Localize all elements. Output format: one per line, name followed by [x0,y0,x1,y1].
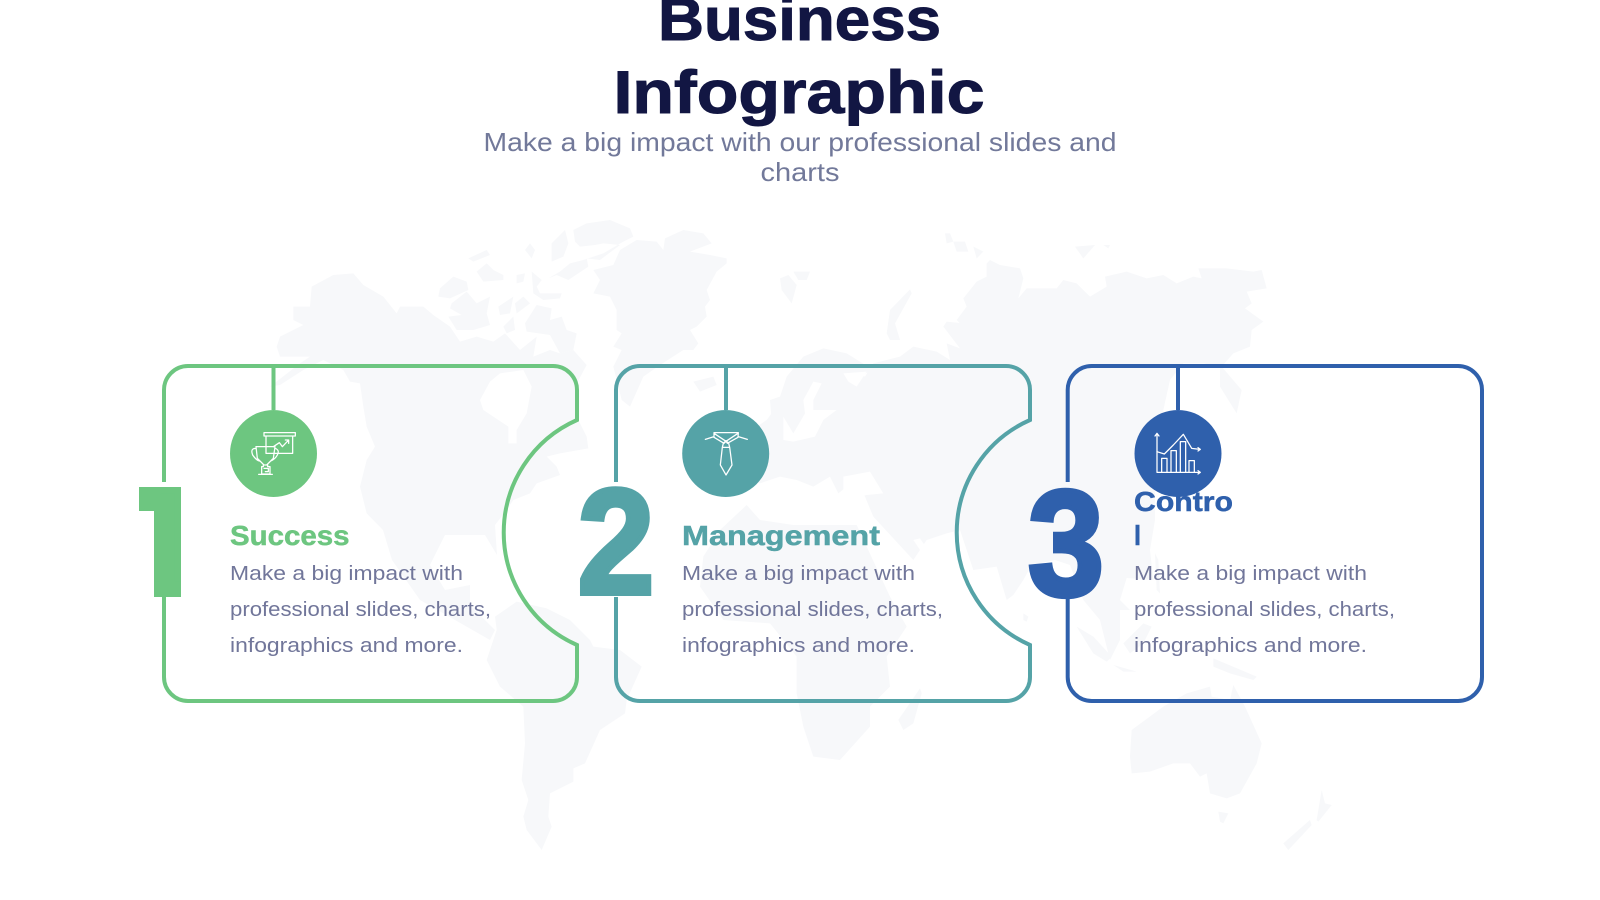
panel: control [1028,366,1482,701]
subtitle: charts [760,157,840,187]
heading: control: l [1134,520,1141,551]
heading: control: Contro [1134,486,1233,517]
body text: control [1134,562,1395,657]
card outline: management [616,366,1030,701]
world map background [270,220,1332,850]
card outline: success [164,366,577,701]
body text: control: professional slides, charts, [1134,598,1395,621]
body text: success: infographics and more. [230,634,463,657]
body text: control: Make a big impact with [1134,562,1367,585]
card outline: control [1068,366,1482,701]
body text: management [682,562,943,657]
icon: bar and line chart [1134,410,1222,497]
body text: management: Make a big impact with [682,562,915,585]
panel: management [578,366,1030,701]
body text: success [230,562,491,657]
title [614,0,984,126]
body text: success: Make a big impact with [230,562,463,585]
icon: trophy and presentation board [230,410,317,497]
number 3: 3 [1028,459,1104,627]
heading: management: Management [682,520,880,551]
panel: success [135,366,577,701]
heading: control [1134,486,1233,551]
subtitle: Make a big impact with our professional slides and [484,127,1116,157]
body text: management: professional slides, charts, [682,598,943,621]
icon: necktie [682,410,769,497]
subtitle [484,127,1116,187]
body text: control: infographics and more. [1134,634,1367,657]
title: Infographic [614,59,984,126]
heading: success: Success [230,520,350,551]
body text: management: infographics and more. [682,634,915,657]
number 2: 2 [578,458,654,626]
body text: success: professional slides, charts, [230,598,491,621]
number 1: 1 [135,461,195,629]
number 1 [139,487,181,597]
